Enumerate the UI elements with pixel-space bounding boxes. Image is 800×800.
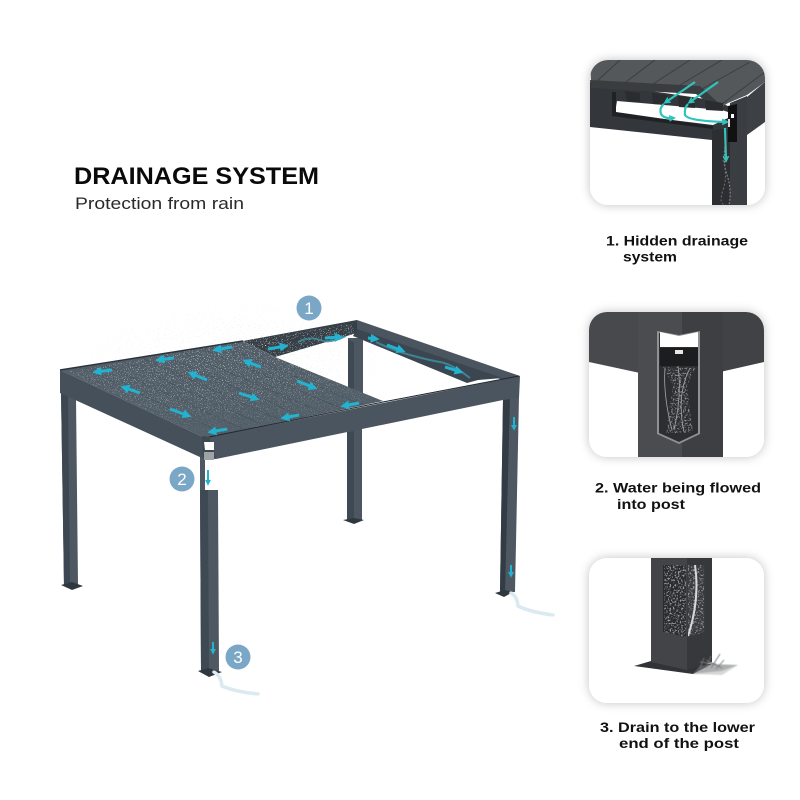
badge 2: 2 [177, 470, 187, 489]
right post [495, 396, 519, 597]
panel: drain at lower end of post detail [589, 558, 764, 703]
beam front [590, 82, 728, 140]
infographic canvas [60, 54, 770, 751]
base plate [634, 661, 712, 674]
post slot [657, 331, 700, 444]
badge 1: 1 [304, 299, 314, 318]
caption 2: 2. Water being flowed [595, 480, 761, 496]
left beam [589, 312, 640, 373]
louvred roof panel [60, 341, 383, 438]
badge 2 [170, 466, 194, 492]
caption 3: end of the post [619, 735, 739, 751]
caption 3: 3. Drain to the lower [600, 719, 756, 735]
rain spray above roof [90, 304, 380, 388]
frame: left beam [60, 370, 205, 459]
water stream: right post [511, 593, 553, 615]
water in slot [663, 367, 696, 433]
frame: back beam with channel [243, 320, 357, 357]
roof slats [590, 60, 765, 107]
panel: hidden drainage detail [590, 60, 765, 205]
panel: water flowing into post detail [589, 312, 764, 457]
caption 3 [600, 719, 756, 751]
title: DRAINAGE SYSTEM [74, 163, 319, 190]
caption 2 [595, 480, 761, 512]
splash [693, 654, 738, 675]
caption 2: into post [617, 496, 685, 512]
front post [198, 456, 222, 677]
window left [663, 565, 686, 637]
slat ends [625, 91, 723, 111]
post left face [638, 312, 682, 457]
water stream: front post [214, 672, 258, 694]
right side beam [747, 82, 765, 135]
post right face [682, 312, 723, 457]
water ripples in the channels [298, 336, 470, 378]
channel opening [615, 101, 728, 125]
flow arrows on posts [208, 417, 514, 653]
roof edge highlight [209, 376, 519, 437]
corner notch: open gutter [204, 442, 214, 490]
water channel speckle [244, 323, 354, 356]
badge 3 [226, 644, 250, 670]
post [712, 128, 730, 205]
water trickle [724, 140, 730, 205]
frame: right side beam [355, 320, 520, 380]
caption 1 [606, 232, 748, 264]
back post [343, 338, 364, 524]
badge 3: 3 [233, 648, 243, 667]
left post [61, 392, 83, 590]
badge 1 [296, 296, 322, 320]
window right [687, 565, 705, 637]
roof back edge [60, 341, 243, 370]
frame: right side inner ledge [353, 329, 503, 383]
roof louvre lines [80, 345, 365, 434]
caption 1: 1. Hidden drainage [606, 232, 748, 248]
post right face [687, 558, 712, 670]
subtitle: Protection from rain [75, 195, 244, 213]
rain speckle on roof [68, 342, 380, 436]
water arrows [660, 82, 726, 160]
frame: front corner cap [202, 436, 216, 459]
caption 1: system [623, 248, 677, 264]
illustration: pergola with water flow [60, 280, 553, 694]
post left face [651, 558, 687, 670]
right beam [720, 312, 764, 372]
flow arrows on roof [95, 337, 461, 432]
frame: front beam [205, 376, 520, 459]
channel lower lip [612, 92, 713, 129]
